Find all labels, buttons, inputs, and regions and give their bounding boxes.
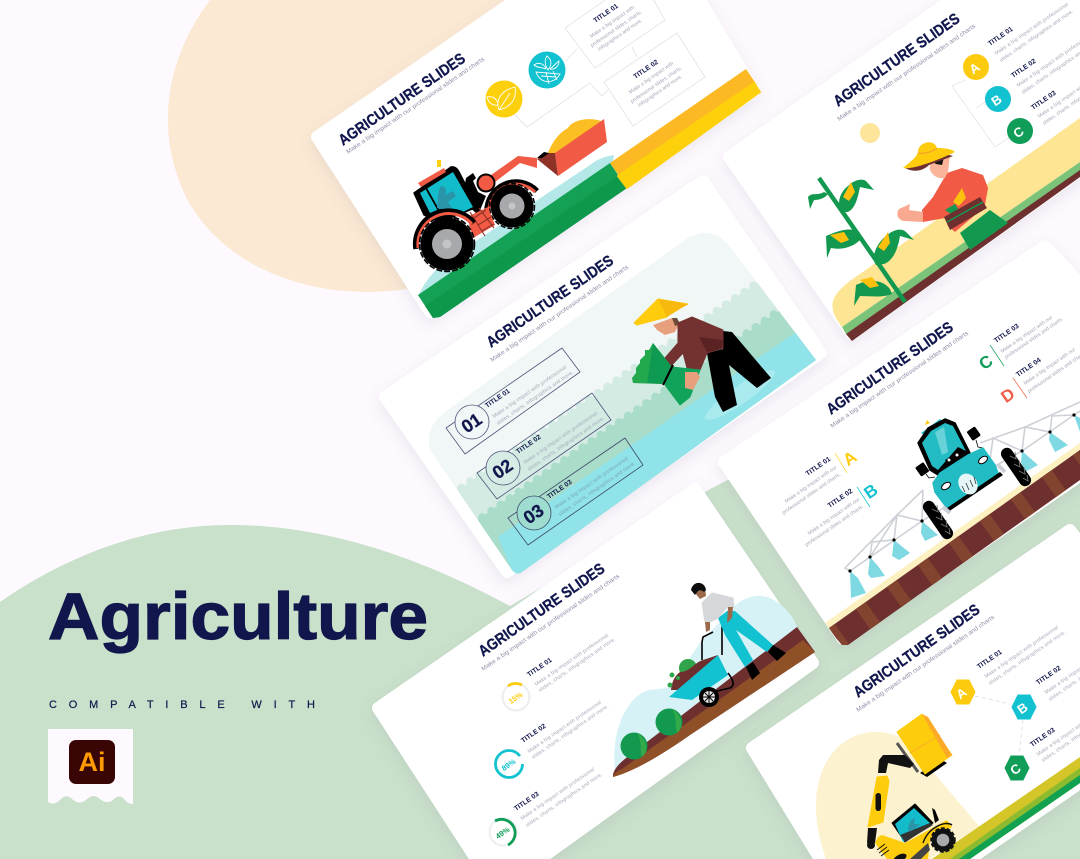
label B: B xyxy=(860,480,881,503)
panel: forklift slide xyxy=(752,530,1080,859)
legs xyxy=(707,331,771,412)
basket xyxy=(665,367,700,405)
icon: Illustrator badge: Ai xyxy=(78,747,106,777)
label D xyxy=(997,378,1027,407)
hay bale xyxy=(920,760,947,777)
list item 01: 01 xyxy=(458,409,486,437)
hex badge B: B xyxy=(1014,699,1031,717)
text block: title 03 xyxy=(1030,65,1080,127)
text block: title 03: TITLE 03 xyxy=(513,791,541,813)
heading: AGRICULTURE SLIDES xyxy=(824,319,957,418)
text block: title 04: TITLE 04 xyxy=(1015,357,1043,379)
text block: title 02: TITLE 02 xyxy=(632,59,660,81)
text block: title 03: Make a big impact with our xyxy=(1000,315,1054,355)
progress ring 15% xyxy=(502,684,530,710)
watermelons xyxy=(620,659,697,760)
text block: title 02: TITLE 02 xyxy=(1010,58,1038,80)
text block: title 02: infographics and more. xyxy=(637,74,684,109)
text block: title 03: TITLE 03 xyxy=(1029,727,1057,749)
hill xyxy=(614,596,798,770)
subheading: Make a big impact with our professional slides and charts xyxy=(836,23,977,123)
ground strip xyxy=(932,757,1080,859)
card xyxy=(378,489,813,859)
list item 02: slides, charts, infographics and more. xyxy=(527,416,606,473)
card xyxy=(385,181,821,572)
label C xyxy=(975,345,1004,374)
engine and exhaust xyxy=(462,173,486,215)
text block: title 02: TITLE 02 xyxy=(827,488,854,510)
chassis xyxy=(875,820,952,859)
text block: title 03: slides, charts, infographics and more. xyxy=(525,772,604,829)
water xyxy=(498,332,816,574)
text block: title 01: slides, charts, infographics and more. xyxy=(999,9,1075,64)
mid layer xyxy=(478,311,816,574)
corn plant xyxy=(808,178,914,306)
card xyxy=(317,0,754,312)
shirt xyxy=(665,317,723,372)
heading: AGRICULTURE SLIDES xyxy=(336,50,469,149)
wheelbarrow xyxy=(668,618,733,707)
progress ring 15%: 15% xyxy=(507,690,525,706)
text block: title 02: slides, charts, infographics and more. xyxy=(531,704,610,761)
text block: title 02: TITLE 02 xyxy=(520,723,548,745)
wheel xyxy=(932,828,954,852)
text block: title 01: infographics and more. xyxy=(597,18,644,53)
label A: A xyxy=(839,447,860,470)
rear wheel xyxy=(416,211,474,249)
subheading: Make a big impact with our professional slides and charts xyxy=(489,264,630,364)
compatible with label: COMPATIBLE WITH xyxy=(49,699,315,711)
sun xyxy=(860,123,880,143)
progress ring 49% xyxy=(490,818,516,846)
list item 01: slides, charts, infographics and more. xyxy=(496,370,575,427)
label D: D xyxy=(997,384,1018,407)
text block: title 01: TITLE 01 xyxy=(592,3,620,25)
rice farmer xyxy=(632,299,771,412)
list item 02: Make a big impact with professional xyxy=(523,411,599,466)
text block: title 01: TITLE 01 xyxy=(805,456,832,478)
text block: title 01: Make a big impact with professional xyxy=(984,625,1060,680)
front wheel xyxy=(487,182,537,212)
text block: title 01: TITLE 01 xyxy=(987,26,1015,48)
cab xyxy=(925,420,930,425)
wheels xyxy=(921,498,955,542)
list item 03: TITLE 03 xyxy=(546,479,574,501)
forklift xyxy=(867,714,955,859)
hand xyxy=(685,372,700,390)
hex badge A: A xyxy=(953,684,970,702)
text block: title 02: Make a big impact with xyxy=(628,61,675,96)
subheading: Make a big impact with our professional slides and charts xyxy=(855,614,996,714)
panel: tractor slide xyxy=(317,0,760,318)
cabin xyxy=(414,167,477,222)
subheading: Make a big impact with our professional slides and charts xyxy=(480,573,621,673)
text block: title 01: Make a big impact with professional xyxy=(994,2,1070,57)
card xyxy=(729,0,1080,334)
text block: title 03 xyxy=(1029,703,1080,764)
heading: AGRICULTURE SLIDES xyxy=(476,560,608,660)
subheading: Make a big impact with our professional slides and charts xyxy=(829,330,970,430)
soil xyxy=(613,627,815,777)
text block: title 04: Make a big impact with our xyxy=(1023,347,1077,387)
text block: title 01: professional slides and charts. xyxy=(781,472,842,516)
text block: title 02: TITLE 02 xyxy=(1035,665,1063,687)
irrigation boom xyxy=(845,402,1080,598)
list item 02 xyxy=(477,393,611,499)
badge B: B xyxy=(988,91,1005,109)
light layer xyxy=(458,282,794,568)
chassis xyxy=(933,448,998,508)
hat xyxy=(634,299,688,325)
text block: title 01: slides, charts, infographics and more. xyxy=(988,630,1067,687)
list item 01 xyxy=(446,348,580,454)
progress ring 89% xyxy=(496,750,522,778)
list item 01: TITLE 01 xyxy=(484,388,512,410)
bucket xyxy=(548,119,604,155)
text block: title 01: Make a big impact with xyxy=(589,5,636,40)
heading: AGRICULTURE SLIDES xyxy=(831,10,963,110)
list item 02: 02 xyxy=(489,455,517,483)
farmer xyxy=(897,142,1008,250)
peach blob xyxy=(168,0,560,292)
ground strip xyxy=(418,69,760,318)
card xyxy=(752,530,1080,859)
panel: corn farmer slide xyxy=(729,0,1080,341)
ground layers xyxy=(832,118,1080,341)
list item 03 xyxy=(508,438,643,545)
arch xyxy=(816,732,979,859)
badge C: C xyxy=(1010,123,1027,141)
text block: title 01: Make a big impact with professional xyxy=(534,633,610,688)
title: Agriculture xyxy=(48,579,428,653)
text block: title 02: Make a big impact with our xyxy=(807,497,861,537)
badge A: A xyxy=(966,59,983,77)
text block: title 02 xyxy=(1035,641,1080,703)
badge A xyxy=(963,54,989,80)
seedlings xyxy=(632,343,672,384)
ground xyxy=(825,443,1080,645)
heading: AGRICULTURE SLIDES xyxy=(484,252,617,351)
illustrated background xyxy=(428,233,816,574)
mirrors xyxy=(966,426,981,441)
green blob xyxy=(0,300,1080,859)
text block: title 03: TITLE 03 xyxy=(1030,90,1058,112)
text block: title 01: professional slides, charts, xyxy=(590,9,643,49)
progress ring 49%: 49% xyxy=(494,825,512,841)
panel: rice planting slide xyxy=(380,233,826,582)
panel: wheelbarrow slide xyxy=(378,489,815,859)
text block: title 03: TITLE 03 xyxy=(993,323,1021,345)
text block: title 02: professional slides and charts. xyxy=(804,504,865,548)
list item 03: Make a big impact with professional xyxy=(554,456,630,511)
text block: title 02: professional slides, charts, xyxy=(630,65,683,105)
heading: AGRICULTURE SLIDES xyxy=(851,601,983,701)
icon: Illustrator badge xyxy=(48,729,133,804)
badge C xyxy=(1007,118,1033,144)
list item 03: slides, charts, infographics and more. xyxy=(558,461,637,518)
hex badge C xyxy=(1005,756,1029,780)
mast xyxy=(868,776,889,827)
face xyxy=(653,318,680,335)
list item 02: TITLE 02 xyxy=(515,434,543,456)
hex badge B xyxy=(1012,695,1036,719)
hill xyxy=(418,155,614,298)
axle stubs xyxy=(943,465,1005,513)
body and ladder xyxy=(467,207,495,238)
list item 03: 03 xyxy=(520,500,548,528)
text block: title 01: TITLE 01 xyxy=(526,657,554,679)
badge B xyxy=(985,86,1011,112)
progress ring 89%: 89% xyxy=(500,757,518,773)
teal tractor xyxy=(915,419,1033,542)
subheading: Make a big impact with our professional slides and charts xyxy=(345,56,486,156)
arm xyxy=(878,755,914,773)
list item 01: Make a big impact with professional xyxy=(492,365,568,420)
farmer xyxy=(691,583,786,680)
panel: sprayer slide xyxy=(719,300,1080,646)
icon: leaf badge xyxy=(486,80,522,118)
text block: title 01: Make a big impact with our xyxy=(784,465,838,505)
hex badge A xyxy=(951,680,975,704)
label C: C xyxy=(975,351,996,374)
connectors and text boxes xyxy=(515,0,705,127)
tractor xyxy=(414,119,607,272)
text block: title 01: TITLE 01 xyxy=(976,649,1004,671)
card xyxy=(724,246,1080,639)
text block: title 01: slides, charts, infographics and more. xyxy=(538,637,617,694)
icon: globe badge xyxy=(528,52,566,88)
cab xyxy=(892,804,933,842)
dashed connectors xyxy=(975,696,1023,755)
hex badge C: C xyxy=(1007,760,1024,778)
text block: title 03: professional slides and charts. xyxy=(1004,316,1065,361)
text block: title 03: Make a big impact with professional xyxy=(520,767,596,822)
connector outline xyxy=(952,80,1010,147)
text block: title 02: Make a big impact with professional xyxy=(527,700,603,755)
